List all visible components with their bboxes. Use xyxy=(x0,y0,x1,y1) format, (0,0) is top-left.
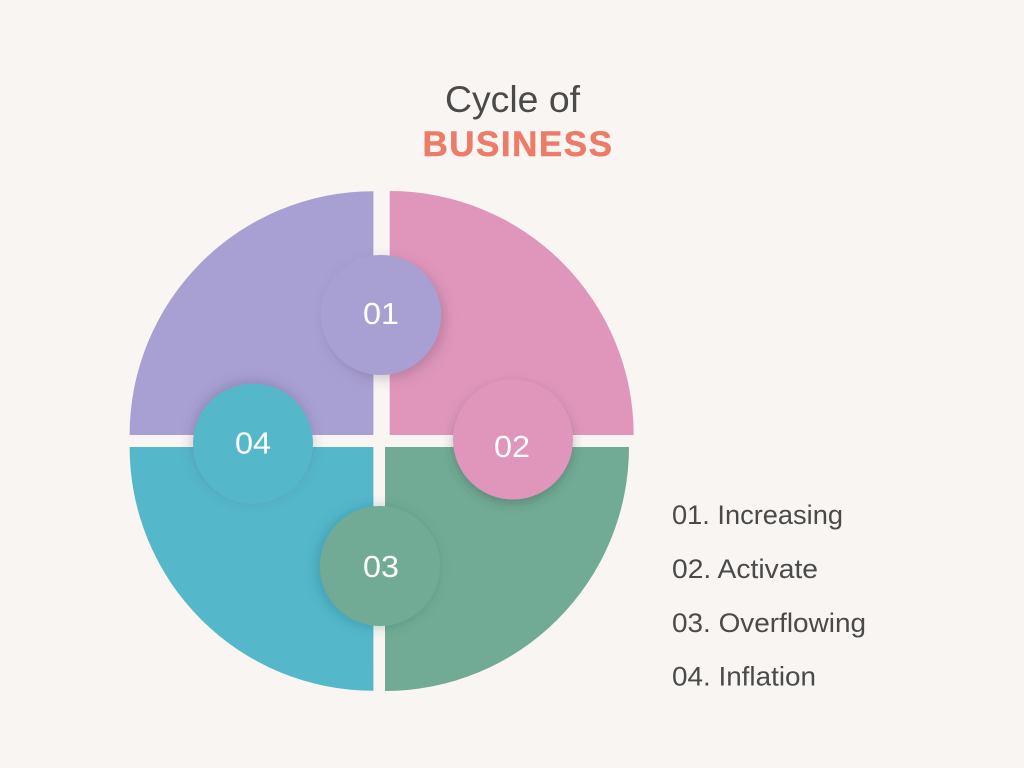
panel: purple quarter xyxy=(130,191,373,435)
badge 03 xyxy=(320,506,440,626)
badge 02 xyxy=(453,380,573,500)
legend list xyxy=(672,500,866,692)
badge 02: 02 xyxy=(494,429,530,464)
title xyxy=(422,79,612,164)
cycle diagram xyxy=(130,191,634,691)
panel: pink quarter xyxy=(390,191,634,435)
legend item 02: 02. Activate xyxy=(672,554,818,584)
title line: BUSINESS: BUSINESS xyxy=(422,125,612,164)
badge 01 xyxy=(321,255,441,375)
badge 01: 01 xyxy=(363,296,399,331)
badge 04: 04 xyxy=(235,426,271,460)
legend item 01: 01. Increasing xyxy=(672,500,843,530)
panel: teal quarter xyxy=(130,447,373,691)
badge 04 xyxy=(193,384,313,504)
legend item 03: 03. Overflowing xyxy=(672,608,866,638)
panel: green quarter xyxy=(385,447,629,691)
title line: Cycle of: Cycle of xyxy=(445,79,581,120)
badge 03: 03 xyxy=(363,549,399,584)
legend item 04: 04. Inflation xyxy=(672,662,816,692)
